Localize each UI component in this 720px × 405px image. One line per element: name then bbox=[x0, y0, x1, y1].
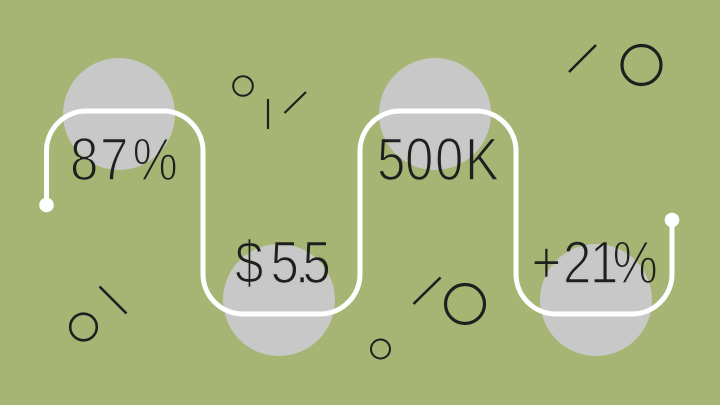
decoration: small circle and ticks top centre bbox=[233, 76, 306, 129]
stat: 87%: 87% bbox=[70, 126, 178, 193]
stat: 87%: 87% bbox=[70, 126, 178, 193]
circle: grey behind +21% bbox=[540, 244, 652, 356]
stat: 87% bbox=[72, 136, 176, 180]
decoration: tick and large circle top right bbox=[569, 45, 661, 84]
infographic canvas bbox=[39, 44, 680, 360]
decoration: tick and circles bottom centre bbox=[371, 278, 484, 358]
stat: 500K bbox=[380, 136, 497, 180]
white wave line with end dots bbox=[39, 111, 679, 314]
stat: $5.5: $5.5 bbox=[235, 229, 331, 296]
circle: grey behind $5.5 bbox=[223, 244, 335, 356]
stat: 500K: 500K bbox=[377, 126, 499, 193]
circle: grey behind 87% bbox=[63, 58, 175, 170]
stat: 500K: 500K bbox=[377, 126, 499, 193]
decoration: circle and tick bottom left bbox=[70, 286, 126, 340]
stat: +21% bbox=[534, 242, 656, 284]
circle: grey behind 500K bbox=[379, 58, 491, 170]
stat: +21%: +21% bbox=[532, 229, 658, 296]
stat: $5.5: $5.5 bbox=[235, 229, 331, 296]
stat: +21%: +21% bbox=[532, 229, 658, 296]
